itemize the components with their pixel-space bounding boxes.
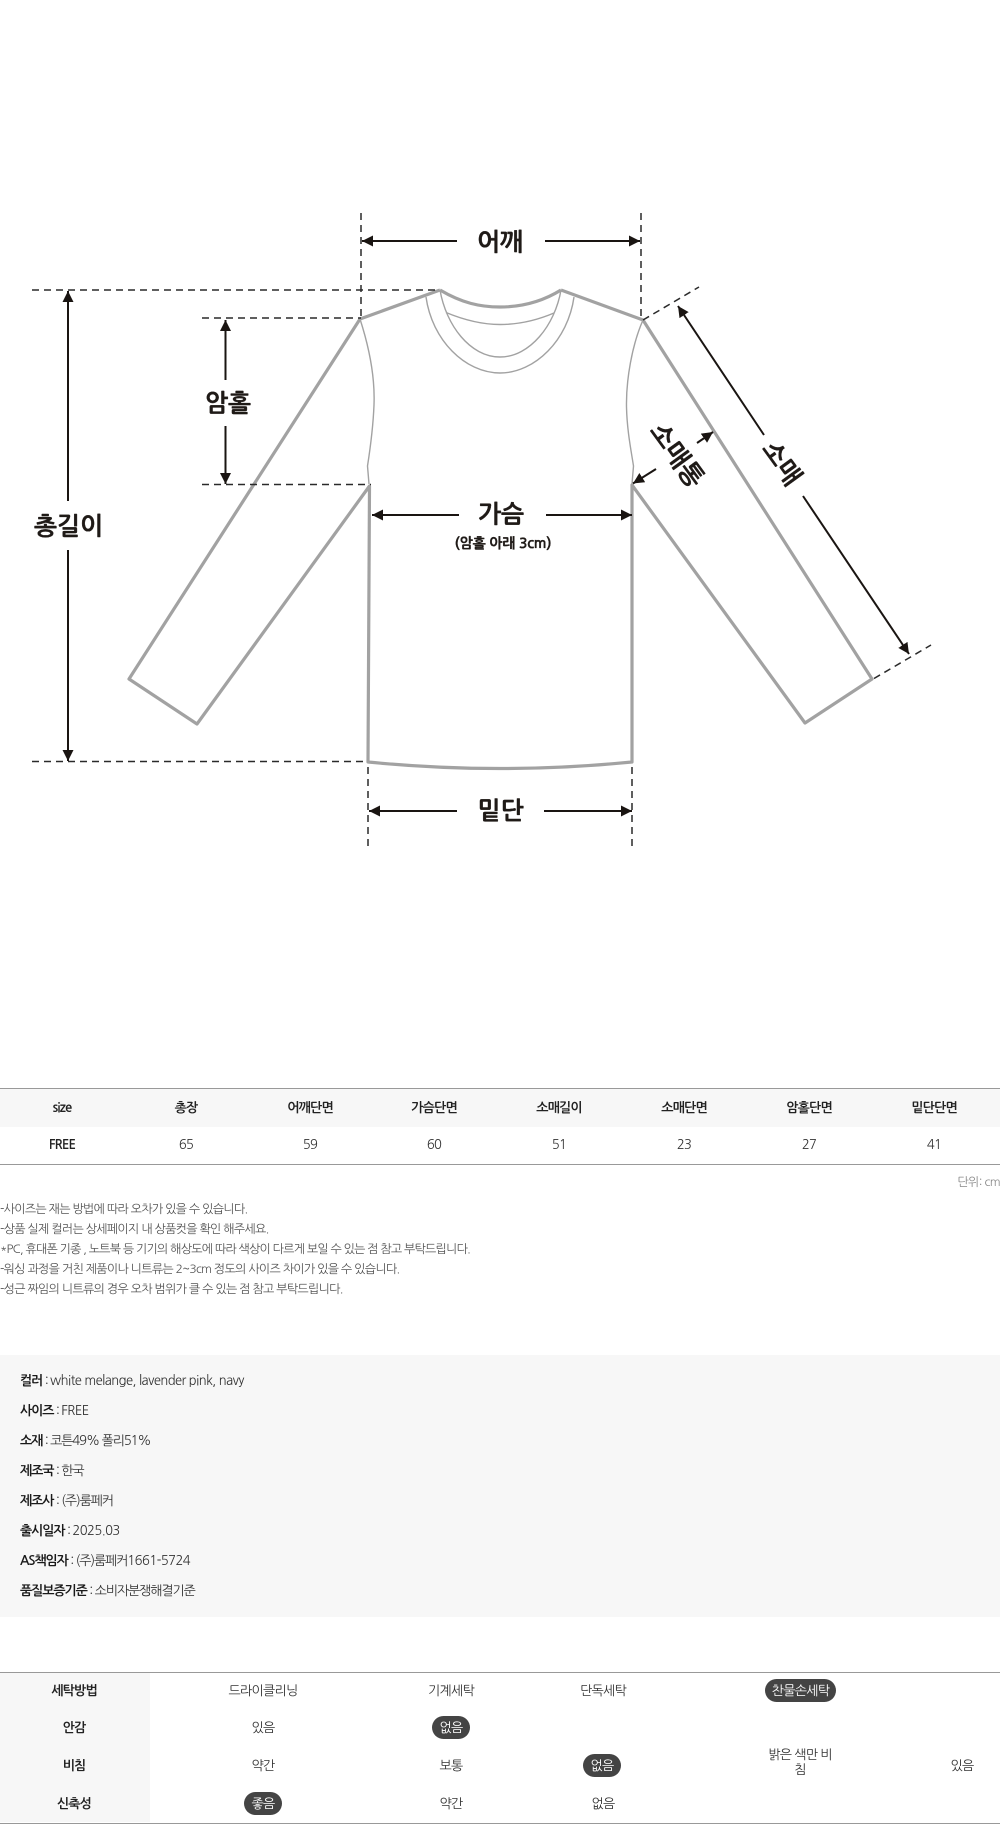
header cell: 가슴단면 (411, 1101, 457, 1114)
value cell: FREE (49, 1138, 75, 1151)
note line: -상품 실제 컬러는 상세페이지 내 상품컷을 확인 해주세요. (0, 1223, 269, 1235)
label: total length: 총길이 (34, 514, 103, 538)
option: two lines (768, 1748, 832, 1776)
label column background (0, 1673, 150, 1822)
label: sleeve length: 소매 (758, 436, 806, 490)
label: sleeve width: 소매통 (645, 418, 709, 492)
selected option: 좋음 (251, 1797, 275, 1810)
option: two lines: 침 (794, 1763, 806, 1776)
row label: 비침 (63, 1759, 85, 1772)
note line: -사이즈는 재는 방법에 따라 오차가 있을 수 있습니다. (0, 1203, 247, 1215)
value cell: 27 (802, 1138, 816, 1151)
size notes (0, 1203, 470, 1295)
value cell: 41 (927, 1138, 941, 1151)
info line: country: 제조국 : 한국 (20, 1464, 84, 1477)
value cell: 65 (179, 1138, 193, 1151)
header cell: 어깨단면 (287, 1101, 333, 1114)
info line: size: 사이즈 : FREE (20, 1404, 89, 1417)
info line: AS contact: AS책임자 : (주)룸페커1661-5724 (20, 1554, 190, 1567)
header cell: 소매단면 (661, 1101, 707, 1114)
panel: product information (0, 1355, 1000, 1617)
info line: manufacturer: 제조사 : (주)룸페커 (20, 1494, 113, 1507)
label: chest: 가슴 (478, 502, 524, 526)
info line: release date: 출시일자 : 2025.03 (20, 1524, 120, 1537)
row label: 안감 (63, 1721, 85, 1734)
selected option (765, 1679, 836, 1702)
label: armhole: 암홀 (205, 390, 251, 416)
selected option (583, 1754, 621, 1777)
row label: 세탁방법 (51, 1684, 97, 1697)
note line: -성근 짜임의 니트류의 경우 오차 범위가 클 수 있는 점 참고 부탁드립니다. (0, 1283, 343, 1295)
care table (0, 1672, 1000, 1824)
dimension arrows (68, 241, 909, 811)
shirt outline (129, 290, 872, 768)
label: chest note: (암홀 아래 3cm) (455, 536, 551, 551)
note line: *PC, 휴대폰 기종 , 노트북 등 기기의 해상도에 따라 색상이 다르게 보일 수 있는 점 참고 부탁드립니다. (0, 1243, 470, 1255)
selected option: 없음 (590, 1759, 614, 1772)
header cell: size (53, 1101, 71, 1114)
size table (0, 1088, 1000, 1165)
unit note: 단위: cm (957, 1176, 1000, 1188)
label: hem: 밑단 (477, 798, 524, 823)
info line: color: 컬러 : white melange, lavender pink, navy (20, 1374, 244, 1387)
selected option: 찬물손세탁 (772, 1684, 829, 1697)
header cell: 암홀단면 (786, 1101, 832, 1114)
header cell: 밑단단면 (911, 1101, 957, 1114)
header cell: 소매길이 (536, 1101, 582, 1114)
value cell: 23 (677, 1138, 691, 1151)
info line: quality standard: 품질보증기준 : 소비자분쟁해결기준 (20, 1584, 195, 1597)
selected option (244, 1792, 282, 1815)
option: 있음 (950, 1759, 974, 1772)
label: shoulder: 어깨 (477, 230, 523, 254)
option: 보통 (439, 1759, 463, 1772)
option: 약간 (439, 1797, 463, 1810)
selected option (432, 1716, 470, 1739)
table header background (0, 1089, 1000, 1127)
option: 없음 (591, 1797, 615, 1810)
selected option: 없음 (439, 1721, 463, 1734)
option: 기계세탁 (428, 1684, 474, 1697)
info line: material: 소재 : 코튼49% 폴리51% (20, 1434, 150, 1447)
option: 있음 (251, 1721, 275, 1734)
size diagram: long sleeve top (32, 213, 932, 846)
note line: -워싱 과정을 거친 제품이나 니트류는 2~3cm 정도의 사이즈 차이가 있을 수 있습니다. (0, 1263, 399, 1275)
value cell: 59 (303, 1138, 317, 1151)
value cell: 60 (427, 1138, 441, 1151)
option: two lines: 밝은 색만 비 (768, 1748, 832, 1761)
option: 약간 (251, 1759, 275, 1772)
value cell: 51 (552, 1138, 566, 1151)
dashed guide lines (32, 213, 931, 846)
option: 단독세탁 (580, 1684, 626, 1697)
row label: 신축성 (57, 1797, 91, 1810)
option: 드라이클리닝 (228, 1684, 298, 1697)
header cell: 총장 (175, 1101, 197, 1114)
